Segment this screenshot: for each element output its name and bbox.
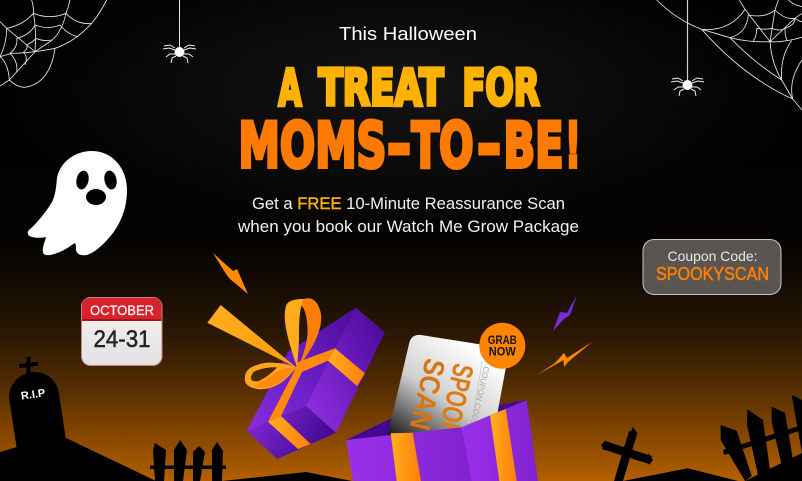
coupon code callout: Coupon Code: <box>668 248 758 264</box>
calendar badge: OCTOBER <box>90 302 154 318</box>
ribbon top loop <box>285 298 321 367</box>
icon: spider web left <box>0 0 107 87</box>
subheading: Get a FREE 10-Minute Reassurance Scan <box>252 195 565 213</box>
tombstone <box>9 357 66 450</box>
subheading: when you book our Watch Me Grow Package <box>237 218 579 236</box>
coupon code callout <box>643 240 781 294</box>
ribbon left loop <box>245 363 297 389</box>
title line 2: TO <box>412 109 474 182</box>
tombstone: R.I.P <box>20 387 46 403</box>
icon: spider left <box>163 0 196 63</box>
coupon card <box>386 335 508 453</box>
icon: purple lightning <box>553 295 577 331</box>
fence left <box>150 440 226 481</box>
title line 2: BE <box>504 109 564 182</box>
icon: ghost <box>28 151 127 255</box>
title line 2: - <box>387 109 411 182</box>
heading: This Halloween: This Halloween <box>339 24 477 44</box>
icon: spider web right <box>657 0 802 110</box>
ground silhouette <box>0 438 802 481</box>
grab now badge <box>479 323 525 369</box>
calendar badge: 24-31 <box>94 326 150 353</box>
title line 1: A <box>278 59 302 117</box>
icon: orange lightning left <box>213 253 248 294</box>
gift box left <box>207 298 385 459</box>
ribbon bands <box>268 348 365 449</box>
title line 1: FOR <box>462 59 540 117</box>
title line 1 <box>278 59 540 117</box>
box front right face <box>462 400 538 481</box>
coupon card: SCAN <box>403 355 450 433</box>
calendar badge <box>82 298 162 366</box>
grab now badge: GRAB <box>488 333 517 347</box>
icon: spider right <box>671 0 704 96</box>
cross right <box>601 427 653 481</box>
title line 2 <box>238 109 581 182</box>
coupon code callout: SPOOKYSCAN <box>656 264 769 284</box>
box ribbon right <box>490 409 517 481</box>
box right face <box>306 308 385 433</box>
fence right <box>721 395 802 481</box>
box ribbon left <box>391 433 421 481</box>
open gift box with coupon <box>346 335 538 481</box>
coupon card: COUPON CODE <box>468 366 491 426</box>
title line 2: MOMS <box>238 109 386 182</box>
grab now badge: NOW <box>489 344 516 358</box>
subheading <box>237 195 579 236</box>
title line 2: ! <box>565 109 581 182</box>
box front left face <box>346 427 472 481</box>
box interior <box>346 400 527 440</box>
title line 1: TREAT <box>318 59 444 117</box>
box bottom face <box>247 406 336 459</box>
ribbon tail <box>207 305 297 368</box>
box side face <box>247 308 356 431</box>
title line 2: - <box>477 109 501 182</box>
icon: orange lightning right <box>537 342 592 375</box>
